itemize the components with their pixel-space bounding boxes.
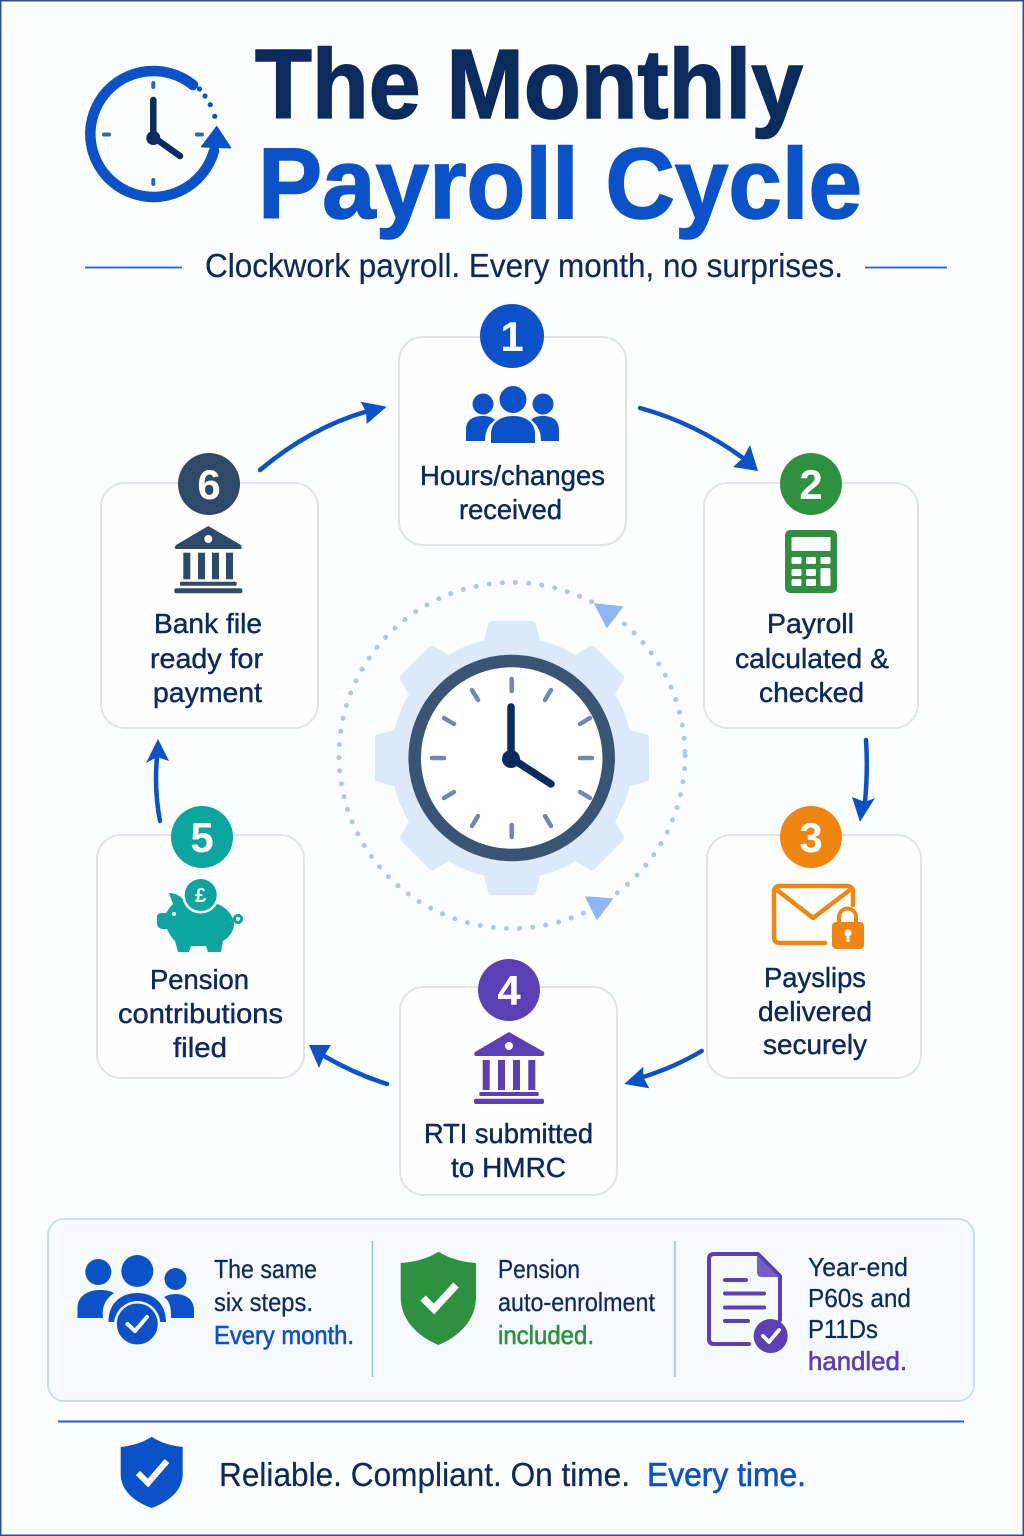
icon: footer blue shield with check (121, 1437, 183, 1508)
icon: document with check (709, 1254, 788, 1353)
text: pension auto-enrolment (498, 1254, 656, 1350)
badge: number 5: 5 (190, 814, 214, 861)
text: year-end P60s and P11Ds (808, 1252, 911, 1376)
icon: green shield with check (401, 1252, 476, 1345)
badge: number 4 (478, 959, 540, 1021)
label (118, 964, 283, 1063)
central clock and gear (339, 582, 685, 928)
label: ready for (150, 643, 263, 674)
label: RTI submitted (424, 1118, 593, 1149)
panel: step 4 RTI submitted (400, 959, 617, 1195)
label: securely (763, 1029, 867, 1060)
label: Pension (150, 964, 249, 995)
icon: calculator (785, 530, 837, 593)
label: filed (173, 1032, 227, 1063)
badge: number 6: 6 (197, 461, 221, 508)
text: year-end P60s and P11Ds: handled. (808, 1346, 907, 1376)
arrow: step 2 to step 3 (852, 740, 875, 822)
title: Payroll Cycle (258, 128, 862, 240)
icon: piggy bank with pound coin: £ (195, 885, 206, 907)
icon: piggy bank with pound coin (157, 876, 242, 952)
text: year-end P60s and P11Ds: P11Ds (808, 1314, 878, 1344)
label (758, 962, 872, 1060)
arrow: step 3 to step 4 (624, 1051, 702, 1088)
label (420, 460, 605, 525)
text: same six steps: The same (214, 1254, 317, 1284)
footer tagline: Reliable. Compliant. On time. (219, 1456, 630, 1493)
text: year-end P60s and P11Ds: Year-end (808, 1252, 908, 1282)
label: Payroll (767, 608, 854, 639)
panel: step 6 bank file (101, 453, 318, 728)
label: Bank file (154, 608, 262, 639)
arrow: step 5 to step 6 (146, 739, 169, 821)
label: checked (759, 677, 864, 708)
panel: benefits strip (48, 1219, 974, 1401)
label (150, 608, 263, 708)
panel: step 2 payroll calculated (704, 453, 918, 728)
label: contributions (118, 998, 283, 1029)
label: received (459, 494, 562, 525)
panel: step 3 payslips delivered (707, 806, 921, 1078)
icon: people group (466, 386, 559, 443)
badge: number 4: 4 (497, 967, 521, 1014)
icon: team with check (78, 1255, 194, 1347)
text: year-end P60s and P11Ds: P60s and (808, 1283, 911, 1313)
footer tagline: Every time. (647, 1456, 806, 1493)
badge: number 2: 2 (799, 461, 823, 508)
badge: number 3 (780, 806, 842, 868)
icon: envelope with padlock (774, 886, 864, 949)
badge: number 1 (480, 304, 544, 368)
text: same six steps: Every month. (214, 1320, 354, 1350)
title: The Monthly (255, 29, 803, 139)
icon: bank building (174, 526, 242, 593)
label: calculated & (735, 643, 889, 674)
arrow: step 6 to step 1 (260, 402, 387, 470)
text: pension auto-enrolment: Pension (498, 1254, 580, 1284)
arrow: step 1 to step 2 (640, 408, 758, 471)
label (735, 608, 889, 708)
badge: number 1: 1 (500, 313, 524, 360)
badge: number 2 (780, 453, 842, 515)
badge: number 5 (171, 806, 233, 868)
badge: number 3: 3 (799, 814, 823, 861)
icon: header clock with circular arrow (90, 71, 230, 197)
text: pension auto-enrolment: included. (498, 1320, 594, 1350)
panel: step 5 pension contributions (97, 806, 304, 1078)
label: to HMRC (451, 1152, 566, 1183)
label: payment (153, 677, 262, 708)
badge: number 6 (178, 453, 240, 515)
label (424, 1118, 593, 1183)
label: Payslips (764, 962, 866, 993)
label: Hours/changes (420, 460, 605, 491)
text: same six steps: six steps. (214, 1287, 313, 1317)
text: pension auto-enrolment: auto-enrolment (498, 1287, 656, 1317)
label: delivered (758, 996, 872, 1027)
title (255, 29, 862, 240)
panel: step 1 hours/changes received (399, 304, 626, 545)
text: same six steps (214, 1254, 354, 1350)
subtitle: Clockwork payroll. Every month, no surprises. (205, 247, 843, 284)
arrow: step 4 to step 5 (309, 1045, 387, 1084)
icon: government building purple (474, 1032, 544, 1104)
